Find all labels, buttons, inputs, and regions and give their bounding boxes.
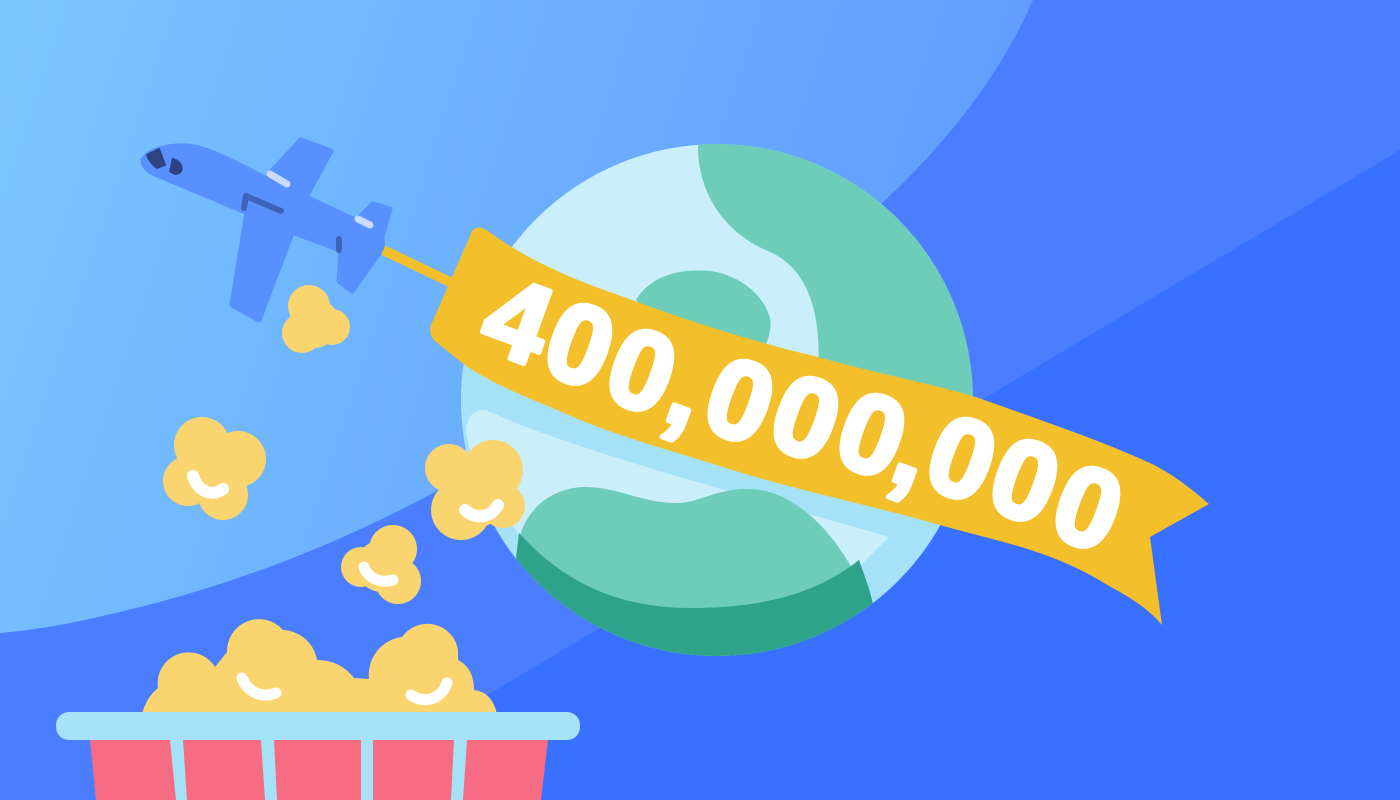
banner number: , bbox=[653, 323, 725, 451]
globe upper continent bbox=[698, 144, 973, 396]
globe pale land strip bbox=[466, 410, 889, 570]
plane wing shadows bbox=[244, 196, 339, 250]
popcorn pile bbox=[142, 619, 497, 714]
banner number: , bbox=[879, 383, 951, 511]
plane body and wings bbox=[143, 140, 390, 320]
globe lower ocean band bbox=[461, 364, 940, 656]
icon: airplane bbox=[143, 140, 390, 320]
plane lower wing bbox=[232, 212, 292, 320]
plane upper wing bbox=[271, 140, 331, 197]
banner number bbox=[467, 251, 1139, 577]
globe shaded bottom bbox=[516, 533, 873, 656]
icon: popcorn kernel near plane bbox=[282, 285, 350, 353]
plane upper tail bbox=[359, 204, 390, 240]
icon: popcorn kernel right bbox=[425, 440, 525, 540]
bucket rim bbox=[56, 712, 580, 740]
banner number: 0 bbox=[974, 411, 1076, 550]
banner number: 0 bbox=[591, 301, 693, 440]
plane lower tail bbox=[339, 248, 380, 291]
popcorn bucket bbox=[56, 619, 580, 800]
plane cockpit window bbox=[147, 149, 165, 168]
icon: popcorn kernel left bbox=[163, 417, 266, 520]
plane wing highlights bbox=[270, 174, 370, 225]
globe ocean bbox=[461, 144, 973, 604]
tow rope bbox=[381, 249, 452, 283]
globe lower continent bbox=[517, 487, 870, 656]
globe centre island bbox=[636, 270, 771, 344]
banner number: 0 bbox=[1037, 438, 1139, 577]
banner number: 0 bbox=[755, 348, 857, 487]
banner number: 4 bbox=[467, 251, 569, 390]
plane side window bbox=[169, 158, 183, 175]
banner number: 0 bbox=[821, 365, 923, 504]
bucket body bbox=[90, 740, 548, 800]
banner number: 0 bbox=[911, 389, 1013, 528]
banner number: 0 bbox=[529, 275, 631, 414]
popcorn highlights bbox=[242, 678, 447, 700]
background light-blue swoosh bbox=[0, 0, 1033, 633]
plane fuselage bbox=[143, 146, 383, 252]
globe bbox=[461, 144, 973, 656]
bucket stripes bbox=[170, 740, 467, 800]
banner number: 0 bbox=[689, 331, 791, 470]
banner ribbon bbox=[430, 227, 1209, 625]
icon: popcorn kernel middle bbox=[341, 525, 421, 604]
